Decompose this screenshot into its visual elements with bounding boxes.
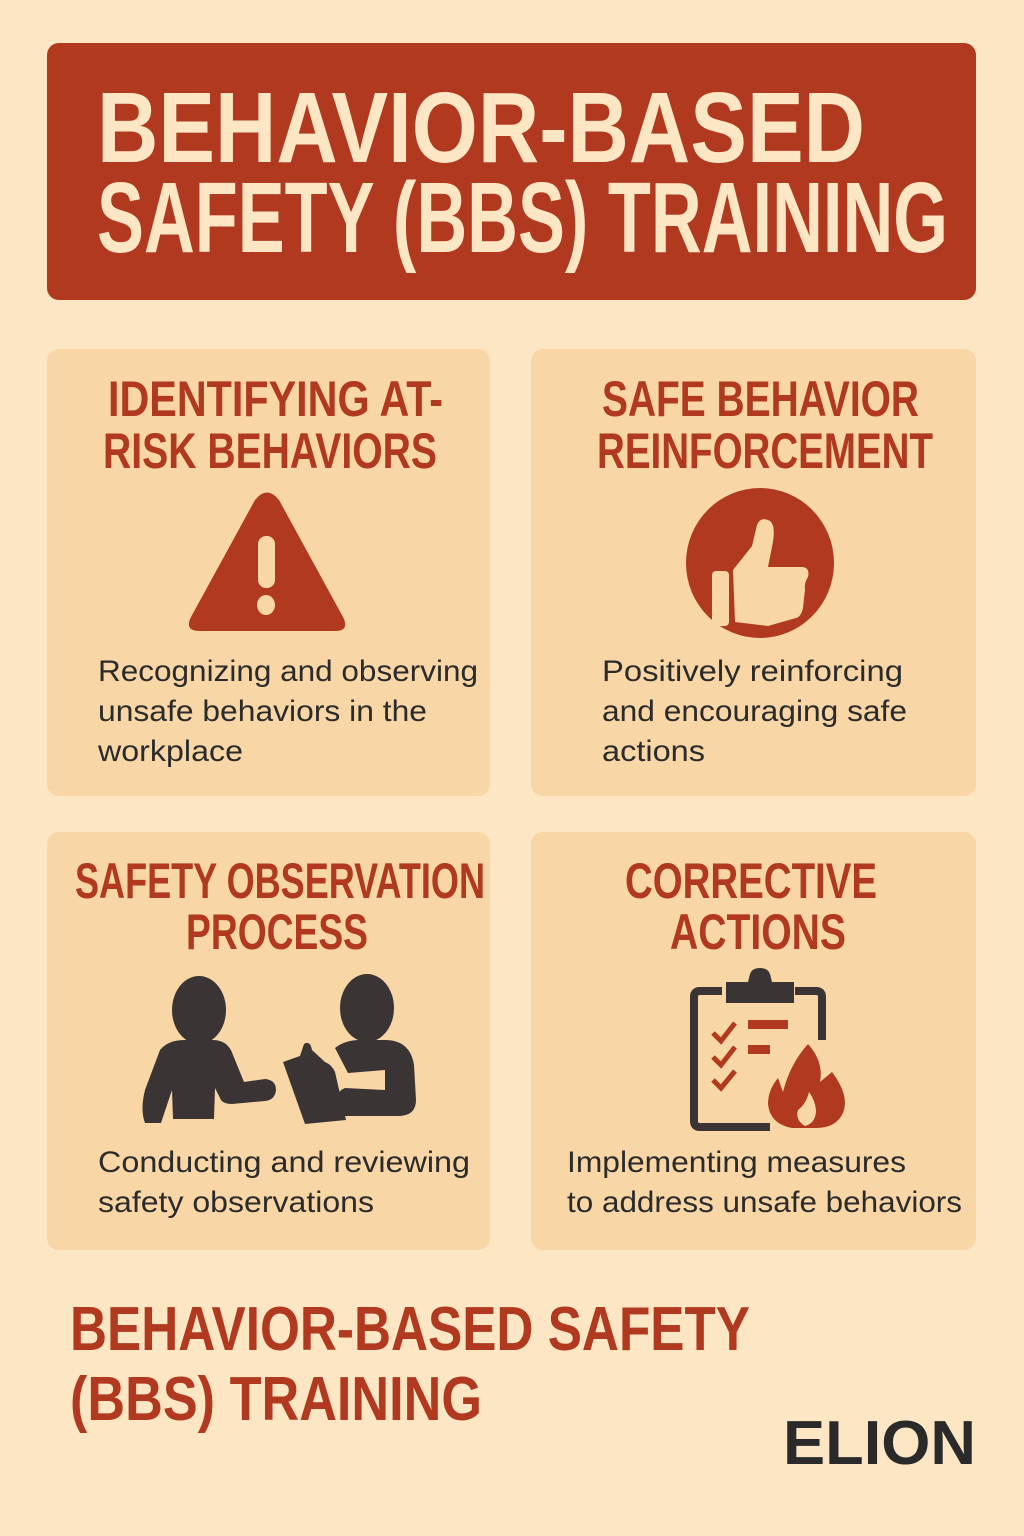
heading: corrective actions: CORRECTIVE (625, 853, 877, 909)
footer title: BEHAVIOR-BASED SAFETY (70, 1295, 750, 1364)
text: observation description (98, 1146, 470, 1219)
heading: identifying at-risk behaviors: RISK BEHAVIORS (103, 423, 437, 479)
text: identifying description (97, 655, 478, 768)
text: reinforcement description (602, 655, 907, 768)
heading: safe behavior reinforcement: SAFE BEHAVIOR (602, 371, 919, 427)
text: corrective description (567, 1146, 962, 1219)
icon: thumbs up (686, 488, 834, 638)
text: observation description: Conducting and reviewing (98, 1146, 470, 1179)
panel: safe behavior reinforcement (531, 349, 976, 796)
text: identifying description: unsafe behaviors in the (98, 695, 427, 728)
footer title (70, 1295, 750, 1434)
heading: safety observation process: SAFETY OBSERVATION (75, 853, 485, 909)
text: identifying description: Recognizing and observing (98, 655, 478, 688)
text: observation description: safety observations (98, 1186, 374, 1219)
icon: warning triangle (189, 492, 345, 631)
text: identifying description: workplace (97, 735, 243, 768)
heading: identifying at-risk behaviors (103, 371, 443, 479)
text: reinforcement description: and encouraging safe (602, 695, 907, 728)
heading: corrective actions (625, 853, 877, 960)
text: reinforcement description: actions (602, 735, 705, 768)
title banner: BEHAVIOR-BASED (97, 72, 865, 184)
icon: two people observing (142, 974, 416, 1124)
panel: identifying at-risk behaviors (47, 349, 490, 796)
heading: safety observation process: PROCESS (186, 904, 368, 960)
panel: safety observation process (47, 832, 490, 1250)
footer title: (BBS) TRAINING (70, 1365, 482, 1434)
logo: ELION: ELION (783, 1409, 976, 1478)
heading: safety observation process (75, 853, 485, 960)
heading: safe behavior reinforcement: REINFORCEMENT (597, 423, 933, 479)
title banner (47, 43, 976, 300)
text: corrective description: Implementing measures (567, 1146, 906, 1179)
text: reinforcement description: Positively reinforcing (602, 655, 903, 688)
text: corrective description: to address unsafe behaviors (567, 1186, 962, 1219)
icon: clipboard with flame (694, 968, 845, 1128)
heading: corrective actions: ACTIONS (670, 904, 846, 960)
panel: corrective actions (531, 832, 976, 1250)
heading: identifying at-risk behaviors: IDENTIFYING AT- (108, 371, 443, 427)
heading: safe behavior reinforcement (597, 371, 933, 479)
